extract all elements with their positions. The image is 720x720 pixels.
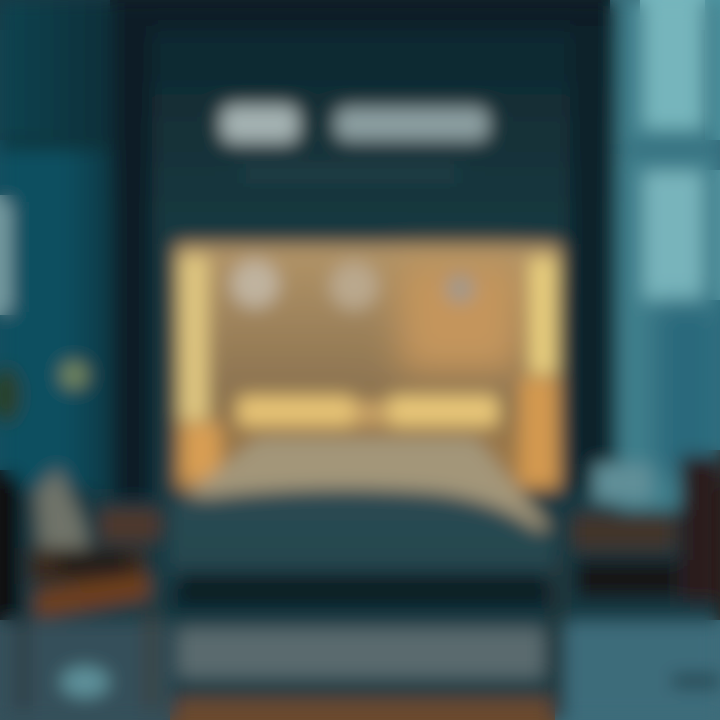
- right wall column: [570, 0, 610, 490]
- left wall panels: [0, 0, 152, 500]
- right chair: [554, 456, 720, 710]
- glowing pillows: [238, 396, 498, 426]
- right window: [618, 0, 720, 510]
- right lower glow: [520, 378, 558, 486]
- title: illegible blurred lettering: [222, 106, 488, 178]
- ceiling band: [115, 0, 610, 26]
- warm orange right tint: [400, 262, 520, 372]
- left chair: [0, 468, 160, 710]
- wall lights: [231, 260, 474, 310]
- floor right: [565, 622, 720, 720]
- plant: [0, 367, 20, 423]
- headboard alcove: [176, 244, 560, 490]
- right light strip: [530, 258, 556, 374]
- wood back panel: [176, 244, 560, 490]
- floor highlight left: [61, 667, 109, 697]
- floor shadow right: [672, 675, 720, 687]
- wood floor: [176, 698, 551, 720]
- left lower glow: [182, 424, 220, 480]
- bed sheet: [185, 438, 552, 530]
- striped rug: [178, 628, 544, 678]
- duvet: [168, 489, 555, 610]
- left light strip: [180, 256, 208, 421]
- dark bed base: [178, 574, 548, 602]
- floor left: [0, 622, 170, 720]
- wall sconce: [61, 362, 87, 388]
